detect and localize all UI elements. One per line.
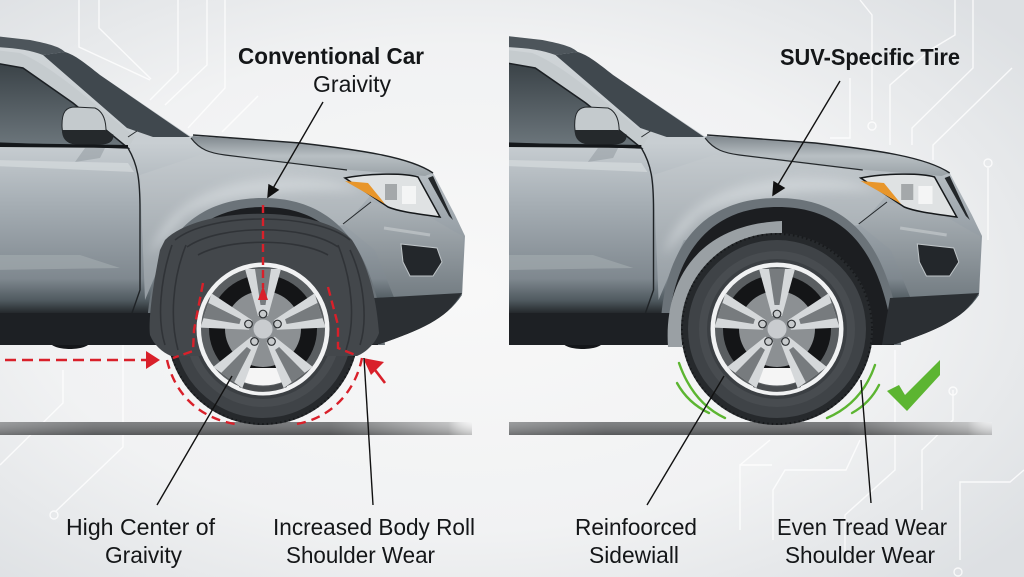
ground line right — [509, 422, 992, 435]
wheel left — [196, 262, 330, 396]
green support arcs — [677, 363, 879, 418]
label: even tread wear: Shoulder Wear — [785, 542, 935, 568]
panel: conventional car — [0, 36, 465, 349]
car body left — [0, 36, 465, 349]
label: high center of gravity: Graivity — [105, 542, 182, 568]
label: even tread wear — [777, 514, 947, 568]
panel: suv-specific tire — [507, 36, 982, 349]
label: reinforced sidewall: Reinfoorced — [575, 514, 697, 540]
title: suv-specific tire: SUV-Specific Tire — [780, 44, 960, 70]
label: reinforced sidewall: Sidewiall — [589, 542, 679, 568]
label: reinforced sidewall — [575, 514, 697, 568]
label: increased body roll — [273, 514, 475, 568]
title: conventional car: Conventional Car — [238, 43, 424, 69]
tire right — [681, 233, 873, 425]
label: high center of gravity: High Center of — [66, 514, 216, 540]
leader arrows — [157, 81, 871, 505]
red stress markers — [5, 205, 385, 424]
label: increased body roll: Shoulder Wear — [286, 542, 435, 568]
tire left — [167, 233, 359, 425]
sidewall liner right — [668, 221, 782, 347]
car body right — [507, 36, 982, 349]
icon: green check mark — [887, 360, 940, 411]
label: increased body roll: Increased Body Roll — [273, 514, 475, 540]
tire bulge left — [150, 214, 379, 356]
label: high center of gravity — [66, 514, 216, 568]
ground line left — [0, 422, 472, 435]
label: gravity: Graivity — [313, 71, 391, 97]
label: even tread wear: Even Tread Wear — [777, 514, 947, 540]
wheel right — [710, 262, 844, 396]
